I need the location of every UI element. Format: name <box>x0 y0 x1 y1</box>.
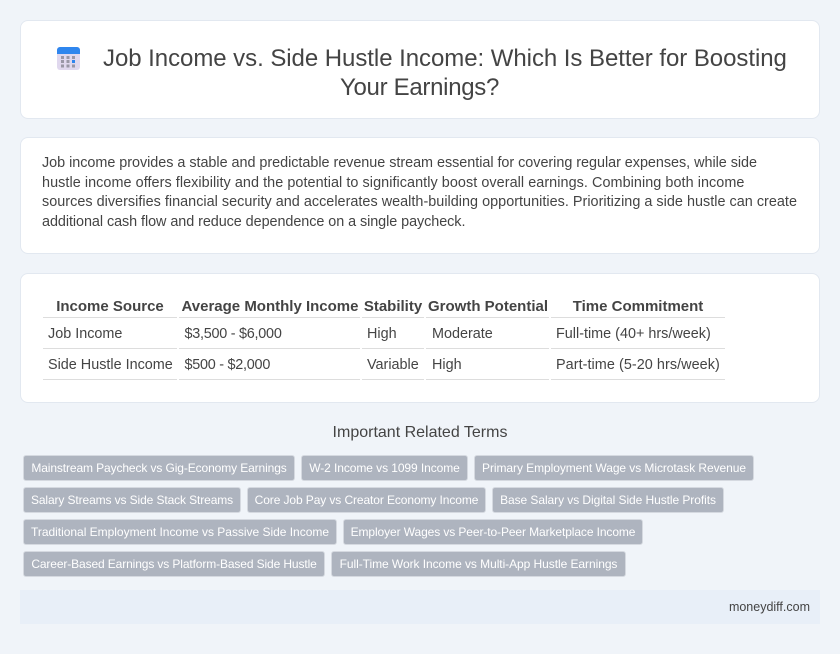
table header: Stability <box>364 298 422 315</box>
title <box>103 45 787 101</box>
text block: summary: additional cash flow and reduce dependence on a single paycheck. <box>42 214 465 230</box>
table row: side hustle income: Side Hustle Income <box>48 357 173 373</box>
tag list: related terms: W-2 Income vs 1099 Income <box>309 461 460 475</box>
table row: job income: $3,500 - $6,000 <box>184 326 282 342</box>
panel: header <box>20 20 820 119</box>
table row: job income <box>48 326 711 342</box>
table row: side hustle income: $500 - $2,000 <box>184 357 270 373</box>
tag list: related terms <box>23 455 754 577</box>
text block: summary: Job income provides a stable and predictable revenue stream essential for covering regular expenses, while side <box>42 155 757 171</box>
footer text: moneydiff.com <box>729 600 810 614</box>
tag list: related terms: Career-Based Earnings vs Platform-Based Side Hustle <box>31 557 317 571</box>
text block: summary: sources diversifies financial security and accelerates wealth-building opportunities. Prioritizing a side hustle can create <box>42 194 797 210</box>
text block: summary <box>42 155 797 230</box>
title: Job Income vs. Side Hustle Income: Which Is Better for Boosting <box>103 45 787 72</box>
panel: footer <box>20 590 820 624</box>
table header: Average Monthly Income <box>182 298 358 315</box>
table row: job income: Full-time (40+ hrs/week) <box>556 326 711 342</box>
tag list: related terms: Core Job Pay vs Creator Economy Income <box>255 493 478 507</box>
table row: job income: High <box>367 326 397 342</box>
heading: related terms: Important Related Terms <box>333 424 507 441</box>
table row: side hustle income: Variable <box>367 357 419 373</box>
table header: Income Source <box>56 298 164 315</box>
tag list: related terms: Traditional Employment Income vs Passive Side Income <box>31 525 329 539</box>
tag list: related terms: Employer Wages vs Peer-to-Peer Marketplace Income <box>351 525 635 539</box>
tag list: related terms: Salary Streams vs Side Stack Streams <box>31 493 233 507</box>
table row: job income: Job Income <box>48 326 122 342</box>
text block: summary: hustle income offers flexibility and the potential to significantly boost overall earnings. Combining both income <box>42 175 744 191</box>
table row: side hustle income: High <box>432 357 462 373</box>
table row: side hustle income: Part-time (5-20 hrs/week) <box>556 357 720 373</box>
tag list: related terms: Mainstream Paycheck vs Gig-Economy Earnings <box>31 461 287 475</box>
table row: side hustle income <box>48 357 720 373</box>
icon: calendar <box>57 47 80 70</box>
panel: summary <box>20 137 820 254</box>
tag list: related terms: Base Salary vs Digital Side Hustle Profits <box>500 493 716 507</box>
tag list: related terms: Primary Employment Wage vs Microtask Revenue <box>482 461 746 475</box>
title: Your Earnings? <box>340 74 499 101</box>
tag list: related terms: Full-Time Work Income vs Multi-App Hustle Earnings <box>340 557 617 571</box>
table row: job income: Moderate <box>432 326 493 342</box>
panel: comparison table <box>20 273 820 403</box>
table header: Growth Potential <box>428 298 548 315</box>
table header <box>56 298 704 315</box>
table header: Time Commitment <box>573 298 703 315</box>
